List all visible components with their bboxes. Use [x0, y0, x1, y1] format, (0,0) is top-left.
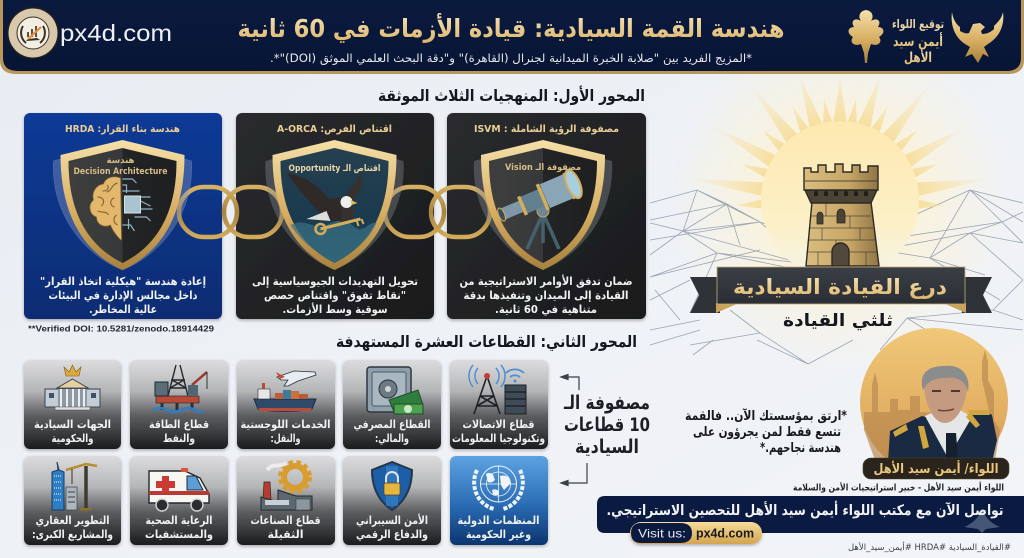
ISVM heading: مصفوفة الرؤية الشاملة : ISVM [474, 124, 619, 135]
collar and tie [925, 410, 972, 458]
tile label: وغير الحكومية [466, 528, 531, 541]
HRDA heading: هندسة بناء القرار: HRDA [65, 124, 180, 135]
icon: gold eagle [952, 12, 1003, 63]
tile: heavy industries [237, 456, 335, 545]
portrait [860, 328, 1008, 476]
tile label: الخدمات اللوجستية [240, 418, 330, 431]
tile label: القطاع المصرفي [354, 418, 430, 431]
hashtags: #القيادة_السيادية #HRDA #أيمن_سيد_الأهل [848, 541, 1011, 553]
shield label: Decision Architecture [74, 167, 168, 177]
signature text: توقيع اللواء [892, 17, 944, 32]
tile label [240, 418, 330, 445]
arrow: to lower row [561, 463, 587, 486]
icon: factory and gear [261, 462, 312, 510]
tile: international organisations [450, 456, 548, 545]
icon: gold oak leaf [849, 10, 883, 63]
ISVM description: متناهية في 60 ثانية. [495, 303, 597, 316]
icon: oil rig [153, 365, 207, 412]
quote: هندسة نجاحهم.* [760, 441, 841, 456]
website pill: px4d.com [696, 526, 754, 540]
sun disc [761, 121, 919, 279]
panel: A-ORCA [236, 113, 434, 319]
signature text: أيمن سيد [893, 32, 943, 50]
tile label: وتكنولوجيا المعلومات [452, 432, 545, 445]
eagle carrying key [286, 171, 364, 234]
tile label: والمشاريع الكبرى: [32, 528, 113, 541]
tile: banking [343, 360, 441, 449]
tile label [34, 418, 111, 445]
HRDA description: عالية المخاطر. [89, 303, 157, 316]
HRDA description: إعادة هندسة "هيكلية اتخاذ القرار" [40, 275, 206, 288]
tile label: والنقل: [270, 432, 301, 445]
tile: telecom [450, 360, 548, 449]
quote: تتسع فقط لمن يجرؤون على [693, 425, 841, 440]
icon: shield with lock [372, 462, 412, 510]
tile label [145, 514, 213, 541]
panel heading: first axis: المحور الأول: المنهجيات الثلاث الموثقة [378, 86, 645, 105]
face [924, 366, 967, 423]
gold chain links [179, 187, 490, 237]
tile label: والدفاع الرقمي [356, 528, 428, 541]
tile label [452, 418, 545, 445]
tile label [149, 418, 209, 445]
website pill: Visit us: [638, 526, 686, 540]
A-ORCA description: "نقاط تفوق" واقتناص حصص [264, 289, 406, 302]
tile label: الأمن السيبراني [356, 513, 428, 527]
arrow: to upper row [561, 374, 579, 390]
tile label: والحكومية [52, 432, 94, 445]
tile: energy [130, 360, 228, 449]
tile: logistics [237, 360, 335, 449]
tile: cybersecurity [343, 456, 441, 545]
icon: skyscraper and crane [52, 462, 97, 510]
header banner [0, 0, 1024, 74]
shield: decision architecture [53, 140, 192, 270]
tile: healthcare [130, 456, 228, 545]
website pill [630, 522, 762, 544]
brain and circuit illustration [90, 177, 152, 240]
tile label: الرعاية الصحية [146, 514, 212, 527]
tile label [32, 514, 113, 541]
shield label: اقتناص الـ Opportunity [288, 164, 380, 174]
tile label [250, 514, 320, 541]
tile label: قطاع الصناعات [250, 514, 320, 527]
tile label [354, 418, 430, 445]
icon: ambulance [149, 468, 209, 511]
tile label: التطوير العقاري [36, 514, 110, 527]
epaulettes [893, 410, 990, 449]
tile: government [24, 360, 121, 449]
panel: HRDA [24, 113, 222, 319]
tile label: قطاع الاتصالات [462, 418, 534, 431]
tile: real estate [24, 456, 121, 545]
tile label: والمالي: [375, 432, 409, 445]
tile label: الجهات السيادية [34, 418, 111, 431]
A-ORCA description: سوقية وسط الأزمات. [282, 302, 388, 316]
tile label [356, 513, 428, 541]
icon: UN emblem [474, 466, 523, 509]
shield label: مصفوفة الـ Vision [505, 163, 581, 173]
ISVM description: القيادة إلى الميدان وتنفيذها بدقة [464, 289, 628, 302]
icon: crowned building [45, 365, 100, 410]
icon: tower and server [469, 365, 526, 414]
ribbon title: درع القيادة السيادية [733, 275, 947, 299]
icon: safe and cash [367, 367, 423, 414]
tile label: الثقيلة [268, 528, 304, 541]
skyline [864, 350, 1000, 460]
tower [804, 164, 879, 266]
tile label: المنظمات الدولية [458, 514, 540, 527]
panel: ISVM [447, 113, 646, 319]
ISVM description [460, 274, 632, 316]
tile label [458, 514, 540, 541]
network lines background [650, 190, 1023, 364]
website label: px4d.com [60, 20, 172, 46]
label: ten sectors matrix [563, 392, 650, 458]
signature text [892, 17, 944, 66]
shield: vision [474, 140, 612, 270]
ribbon banner [690, 267, 992, 313]
tile label: والنفط [163, 432, 195, 445]
A-ORCA description [252, 275, 418, 316]
subtitle: *المزيج الفريد بين "صلابة الخبرة الميدانية لجنرال (القاهرة)" و"دقة البحث العلمي الموثق (DOI)"*. [270, 51, 752, 66]
hero: sun and tower [686, 74, 991, 279]
signature text: الأهل [904, 49, 932, 66]
ribbon subtitle: ثلثي القيادة [783, 311, 893, 331]
A-ORCA description: تحويل التهديدات الجيوسياسية إلى [252, 275, 418, 288]
A-ORCA heading: اقتناص الفرص: A-ORCA [277, 124, 392, 135]
name plate [863, 458, 1009, 479]
label: ten sectors matrix: مصفوفة الـ [563, 392, 650, 414]
section heading: second axis: المحور الثاني: القطاعات العشرة المستهدفة [336, 332, 637, 352]
HRDA description [40, 275, 206, 316]
logo seal [7, 7, 59, 59]
uniform [888, 410, 997, 462]
sun rays [686, 74, 991, 210]
label: ten sectors matrix: السيادية [575, 436, 639, 458]
DOI note: **Verified DOI: 10.5281/zenodo.18914429 [28, 324, 214, 334]
soft sun glow [670, 30, 1010, 370]
label: ten sectors matrix: 10 قطاعات [564, 414, 650, 436]
shield: opportunity [265, 140, 404, 270]
call to action bar [597, 496, 1024, 533]
name plate: اللواء/ أيمن سيد الأهل [874, 460, 998, 477]
waves [290, 221, 376, 263]
telescope illustration [493, 168, 585, 249]
ISVM description: ضمان تدفق الأوامر الاستراتيجية من [460, 274, 632, 288]
HRDA description: داخل مجالس الإدارة في البيئات [48, 289, 198, 302]
tile label: والمستشفيات [145, 528, 213, 541]
shield label: هندسة [106, 156, 134, 166]
decorative star glint [964, 508, 1000, 533]
tile label: قطاع الطاقة [149, 418, 209, 431]
main title: هندسة القمة السيادية: قيادة الأزمات في 60 ثانية [237, 13, 784, 43]
icon: ship and plane [254, 371, 316, 411]
shield label [74, 156, 168, 177]
quote [685, 408, 847, 456]
quote: *ارتق بمؤسستك الآن.. فالقمة [685, 408, 847, 424]
